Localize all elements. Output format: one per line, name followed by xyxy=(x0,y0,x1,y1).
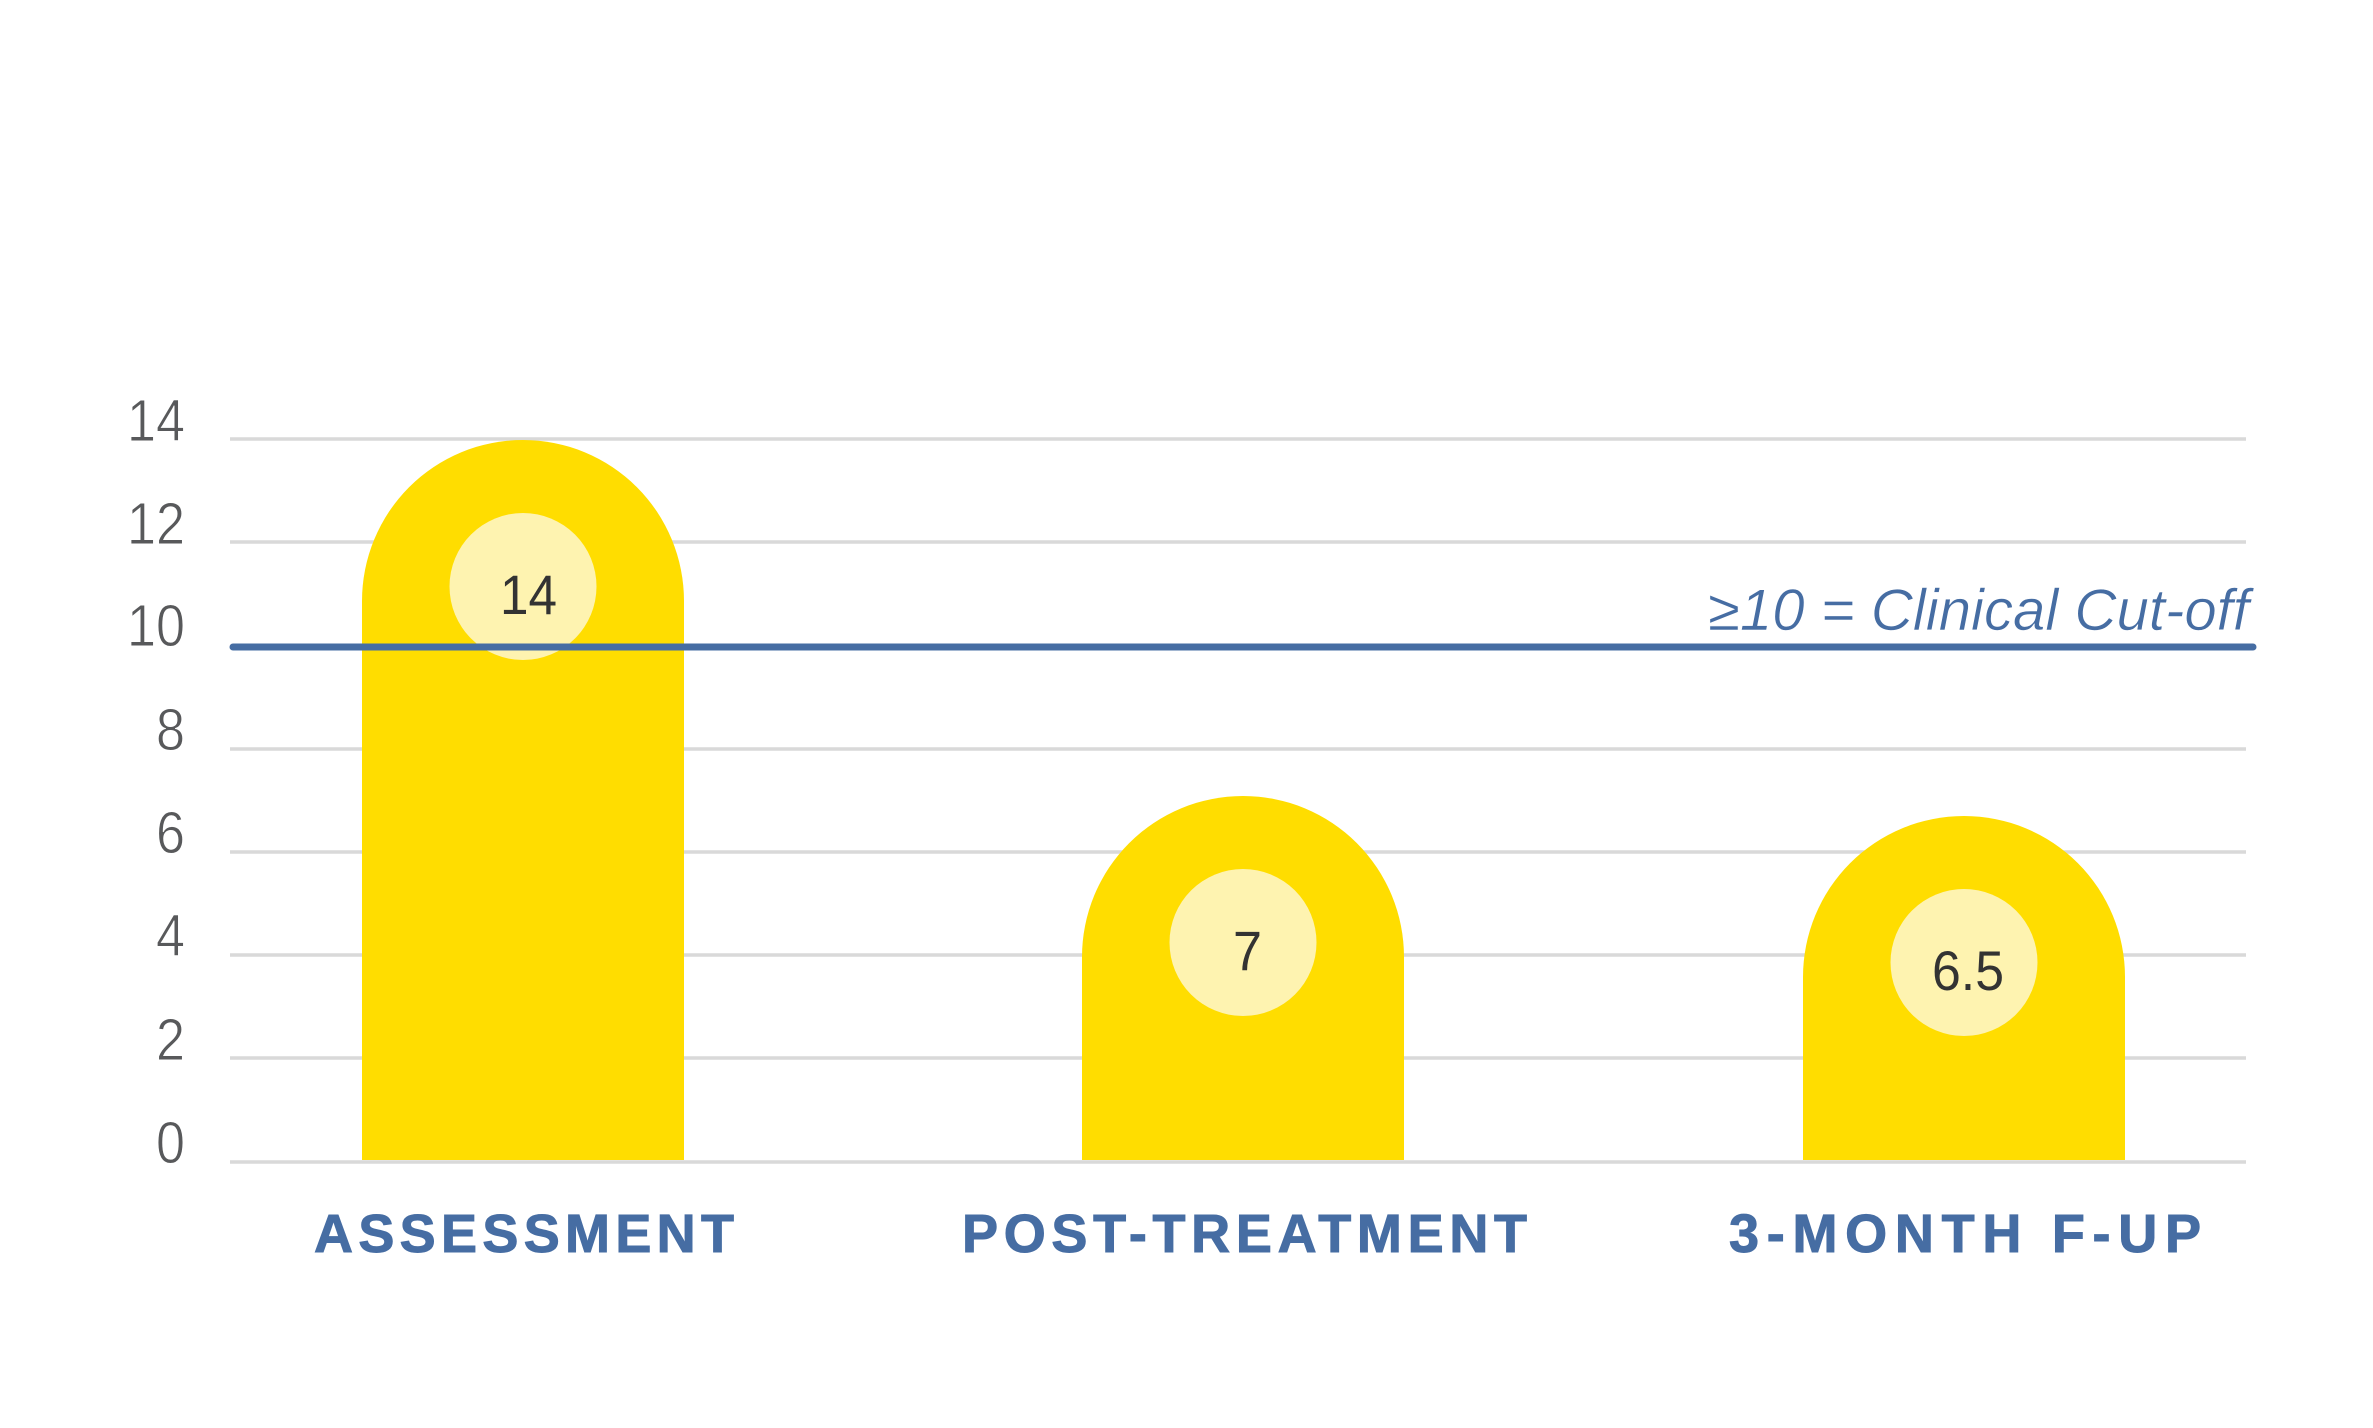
clinical cut-off label: ≥10 = Clinical Cut-off xyxy=(1708,578,2255,643)
y-axis labels: 4 xyxy=(156,903,185,969)
y-axis labels: 6 xyxy=(156,800,185,866)
y-axis labels: 10 xyxy=(127,593,185,659)
y-axis labels xyxy=(127,388,185,1176)
y-axis labels: 14 xyxy=(127,388,185,454)
y-axis labels: 0 xyxy=(156,1110,185,1176)
bar: post-treatment, value 7 xyxy=(1082,796,1404,1160)
clinical cut-off line xyxy=(233,644,2253,650)
bar: post-treatment, value 7: 7 xyxy=(1233,919,1262,982)
y-axis labels: 2 xyxy=(156,1007,185,1073)
bar: 3-month follow-up, value 6.5: 6.5 xyxy=(1932,939,2004,1002)
category labels: POST-TREATMENT xyxy=(962,1204,1527,1264)
bar: assessment, value 14 xyxy=(362,440,684,1160)
bar: 3-month follow-up, value 6.5 xyxy=(1803,816,2125,1160)
category labels: ASSESSMENT xyxy=(314,1204,734,1264)
y-axis labels: 12 xyxy=(127,491,185,557)
bar: assessment, value 14: 14 xyxy=(500,563,557,626)
category labels xyxy=(314,1204,2201,1264)
category labels: 3-MONTH F-UP xyxy=(1729,1204,2201,1264)
y-axis labels: 8 xyxy=(156,697,185,763)
